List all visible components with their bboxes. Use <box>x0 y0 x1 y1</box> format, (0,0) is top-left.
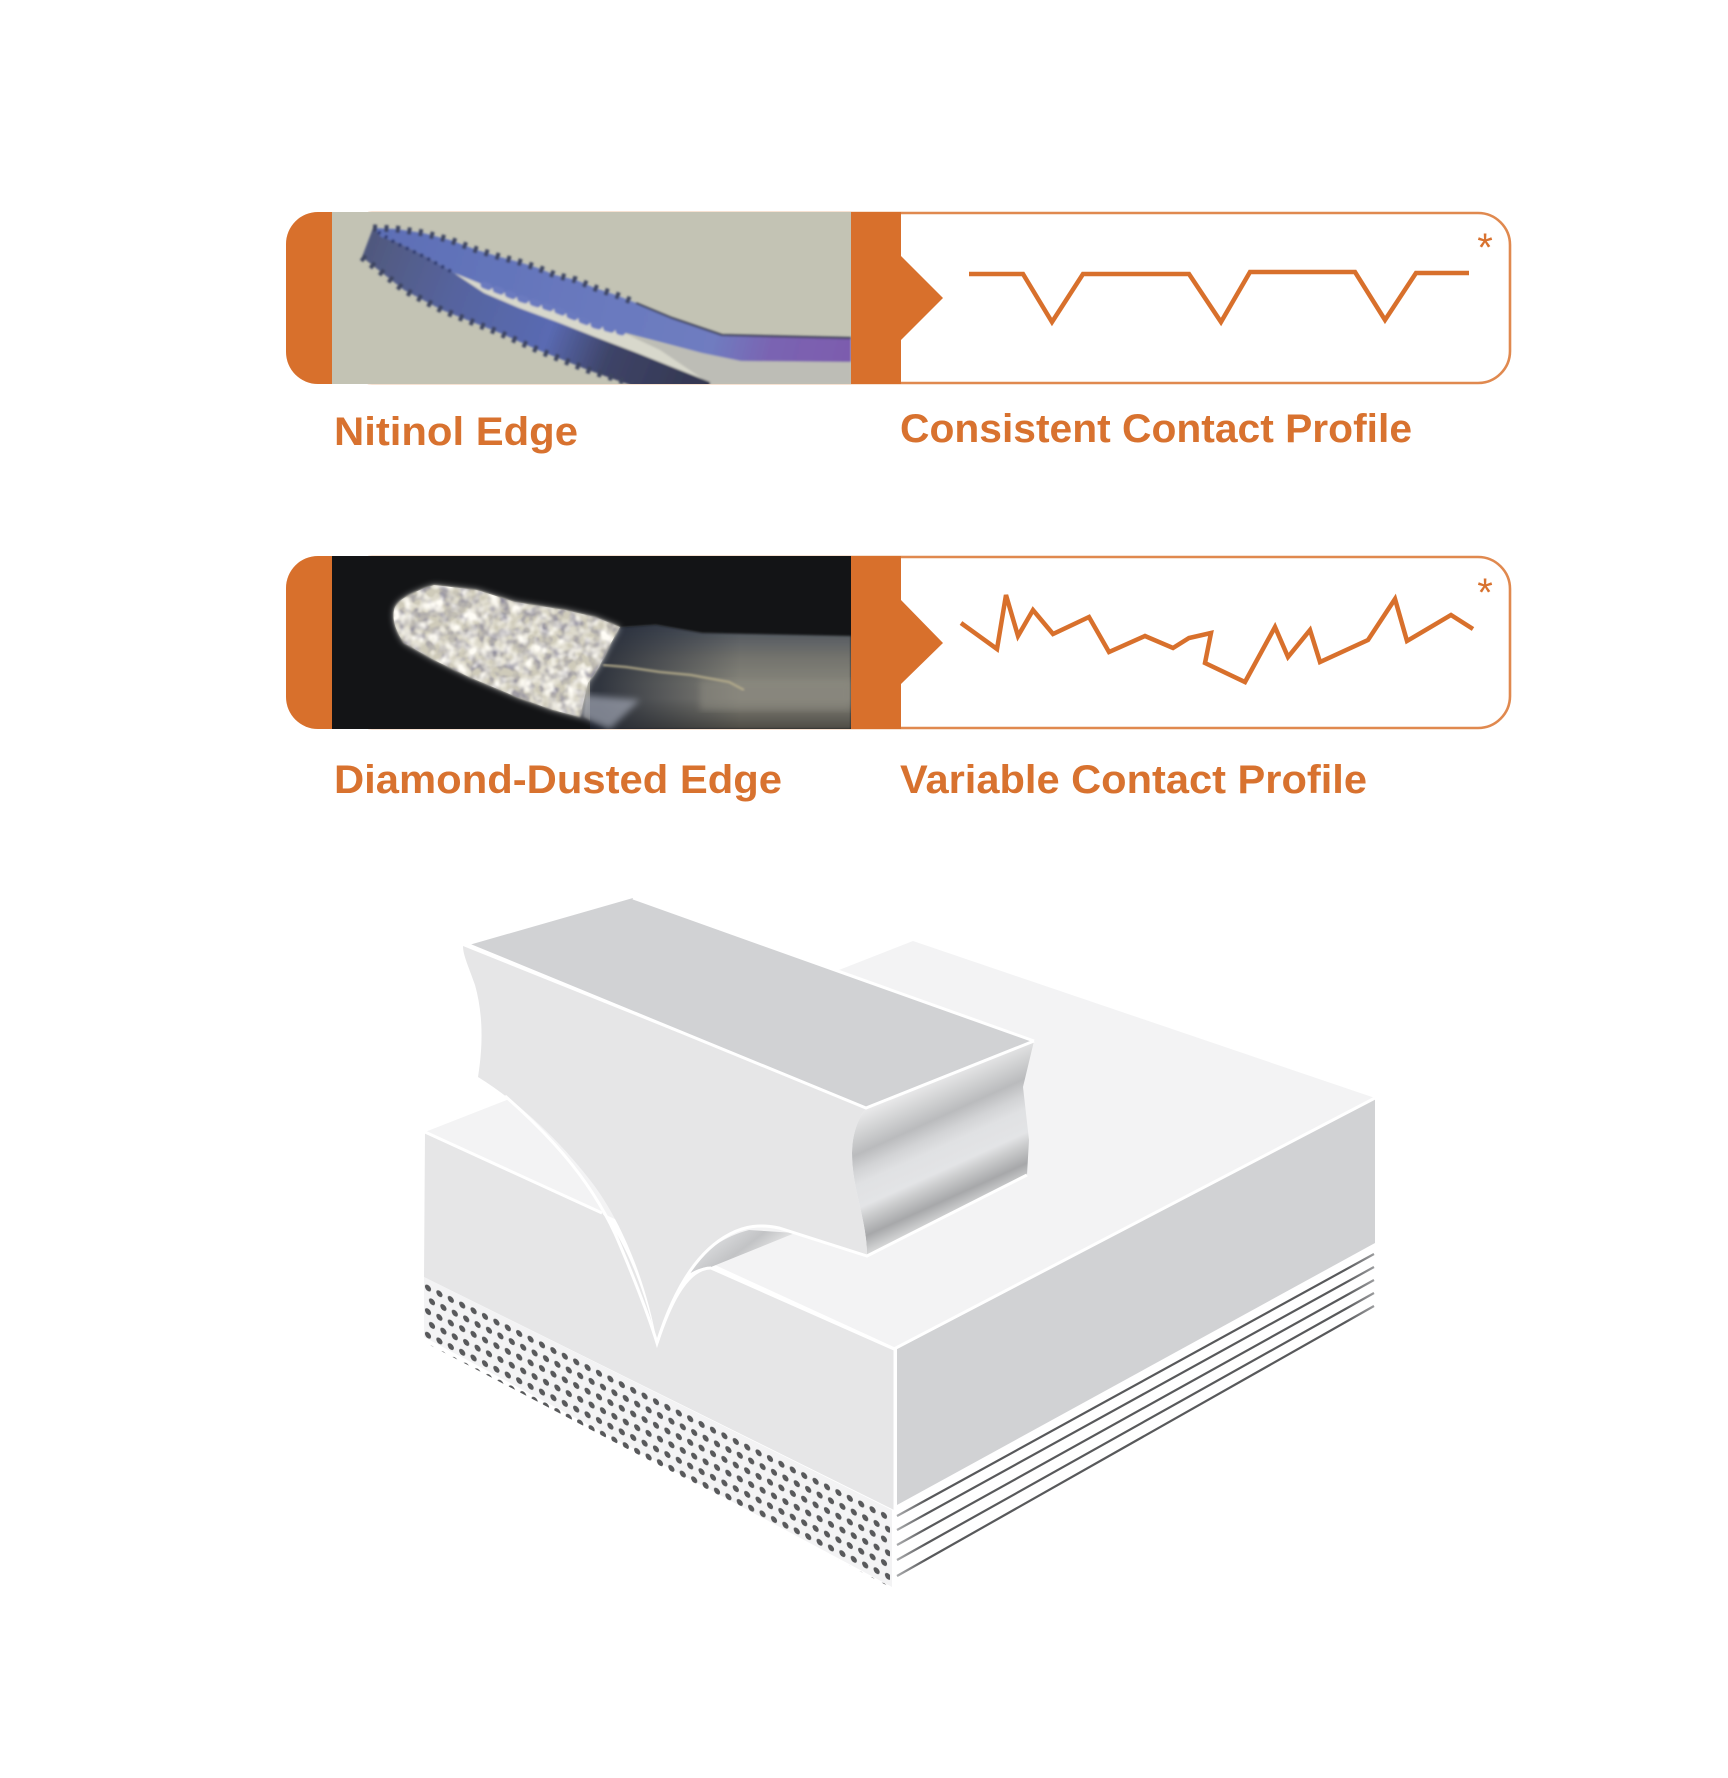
illustration: file edge on dentin block <box>424 898 1375 1587</box>
block: top face <box>425 941 1375 1348</box>
photo: diamond-dusted file tip <box>332 556 851 729</box>
photo: nitinol file tip <box>332 212 851 386</box>
block edge highlights <box>425 1098 1375 1510</box>
block: dotted lower band <box>424 1277 892 1587</box>
asterisk: * <box>1477 226 1493 270</box>
block: right face <box>897 1098 1375 1505</box>
tool: front face <box>463 946 867 1343</box>
orange left cap <box>286 556 332 729</box>
dots texture <box>424 1280 890 1587</box>
label: Diamond-Dusted Edge: Diamond-Dusted Edge <box>334 758 782 802</box>
tool: top face <box>469 898 1034 1108</box>
notch outline <box>657 1268 711 1343</box>
block: front face <box>424 1132 894 1510</box>
white profile box outline <box>340 557 1510 728</box>
tool: end face <box>852 1041 1034 1255</box>
label: Consistent Contact Profile: Consistent Contact Profile <box>900 407 1412 451</box>
profile line: variable <box>961 595 1473 682</box>
profile line: consistent <box>969 272 1469 322</box>
tool outlines <box>469 898 1034 1343</box>
asterisk: * <box>1477 571 1493 615</box>
label: Variable Contact Profile: Variable Contact Profile <box>900 758 1367 802</box>
panel: diamond-dusted edge row <box>286 556 1510 802</box>
panel: nitinol edge row <box>286 212 1510 454</box>
orange divider with arrow <box>851 556 943 729</box>
orange left cap <box>286 212 332 384</box>
notch shading under blade <box>661 1230 795 1320</box>
label: Nitinol Edge: Nitinol Edge <box>334 410 578 454</box>
white profile box outline <box>340 213 1510 383</box>
orange divider with arrow <box>851 212 943 384</box>
striped lines on right side <box>897 1254 1374 1576</box>
